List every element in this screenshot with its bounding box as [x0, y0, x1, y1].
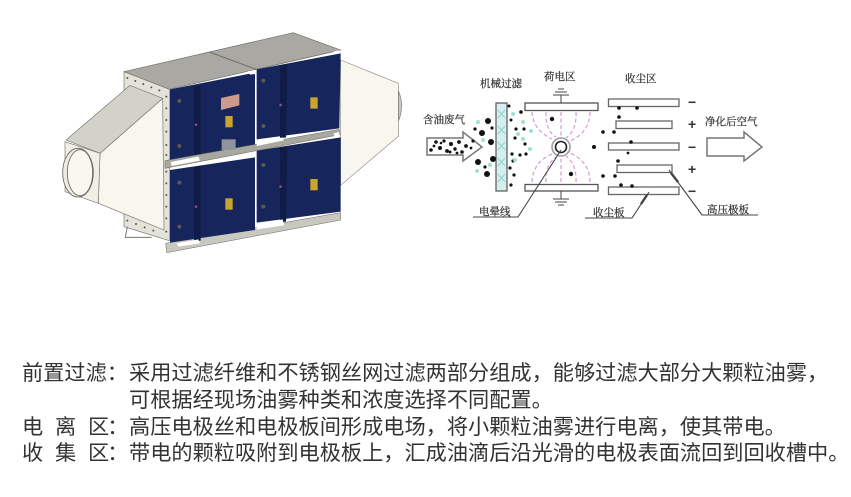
flange bolts — [126, 77, 167, 233]
white gaps — [171, 157, 200, 166]
text: 电离区 label: 电离区： — [22, 416, 128, 439]
label: 收尘板: 收尘板 — [593, 206, 625, 219]
label: 荷电区: 荷电区 — [544, 70, 576, 83]
inlet arrow — [427, 132, 482, 161]
blue panel top right — [257, 53, 341, 139]
particles — [471, 104, 596, 187]
nameplate — [221, 94, 239, 110]
collector particles — [601, 106, 639, 188]
polarity signs: + — [688, 161, 696, 177]
collecting plate leader — [585, 192, 649, 218]
text: 前置过滤 description line 1: 采用过滤纤维和不锈钢丝网过滤两部分组成，能够过滤大部分大颗粒油雾， — [129, 362, 828, 385]
text: 收集区 description: 带电的颗粒吸附到电极板上，汇成油滴后沿光滑的电极表面流回到回收槽中。 — [129, 442, 849, 465]
label: 电晕线: 电晕线 — [479, 205, 511, 218]
polarity signs: − — [688, 183, 696, 199]
filter screen — [496, 103, 507, 191]
text: 收集区 label: 收集区： — [22, 442, 128, 465]
polarity signs: − — [688, 94, 696, 110]
polarity signs: + — [688, 116, 696, 132]
polarity signs: − — [688, 139, 696, 155]
high voltage plate leader — [669, 170, 758, 215]
corona wire — [473, 138, 570, 217]
rear outlet collar — [398, 91, 402, 121]
inlet round duct — [63, 148, 93, 197]
charging plate top — [525, 103, 598, 110]
warning labels — [225, 97, 318, 210]
field lines — [532, 112, 590, 182]
top cover — [124, 33, 341, 89]
label: 含油废气: 含油废气 — [423, 113, 465, 126]
label: 机械过滤: 机械过滤 — [480, 77, 522, 90]
blue panel top left — [170, 73, 255, 160]
inlet hood top — [66, 85, 163, 153]
text: 前置过滤 description line 2: 可根据经现场油雾种类和浓度选择不同配置。 — [129, 389, 553, 412]
blue panel bottom left — [170, 157, 255, 243]
panel pink dots — [195, 104, 282, 208]
outlet arrow — [707, 132, 762, 161]
polarity signs — [688, 94, 696, 199]
process diagram — [423, 70, 762, 219]
horizontal divider shelf — [165, 129, 340, 168]
collecting plates — [608, 99, 679, 194]
lower frame — [166, 213, 341, 253]
data plate — [222, 139, 236, 150]
label: 净化后空气: 净化后空气 — [705, 115, 758, 128]
label: 高压极板: 高压极板 — [707, 203, 749, 216]
rear outlet hood — [341, 60, 399, 185]
charging plate bottom — [525, 184, 598, 191]
label: 收尘区: 收尘区 — [625, 72, 657, 85]
ground symbol top — [553, 89, 569, 103]
cyan particles — [475, 112, 533, 173]
equipment illustration — [63, 33, 402, 253]
text: 电离区 description: 高压电极丝和电极板间形成电场，将小颗粒油雾进行电离，使其带电。 — [129, 416, 786, 439]
ground symbol bottom — [553, 191, 569, 205]
support foot — [125, 227, 152, 237]
panel latches — [177, 79, 265, 229]
inlet box — [65, 142, 100, 203]
inlet hood side — [98, 98, 164, 230]
blue panel bottom right — [257, 137, 341, 223]
front flange — [124, 72, 169, 241]
text: 前置过滤 label: 前置过滤： — [22, 362, 128, 385]
